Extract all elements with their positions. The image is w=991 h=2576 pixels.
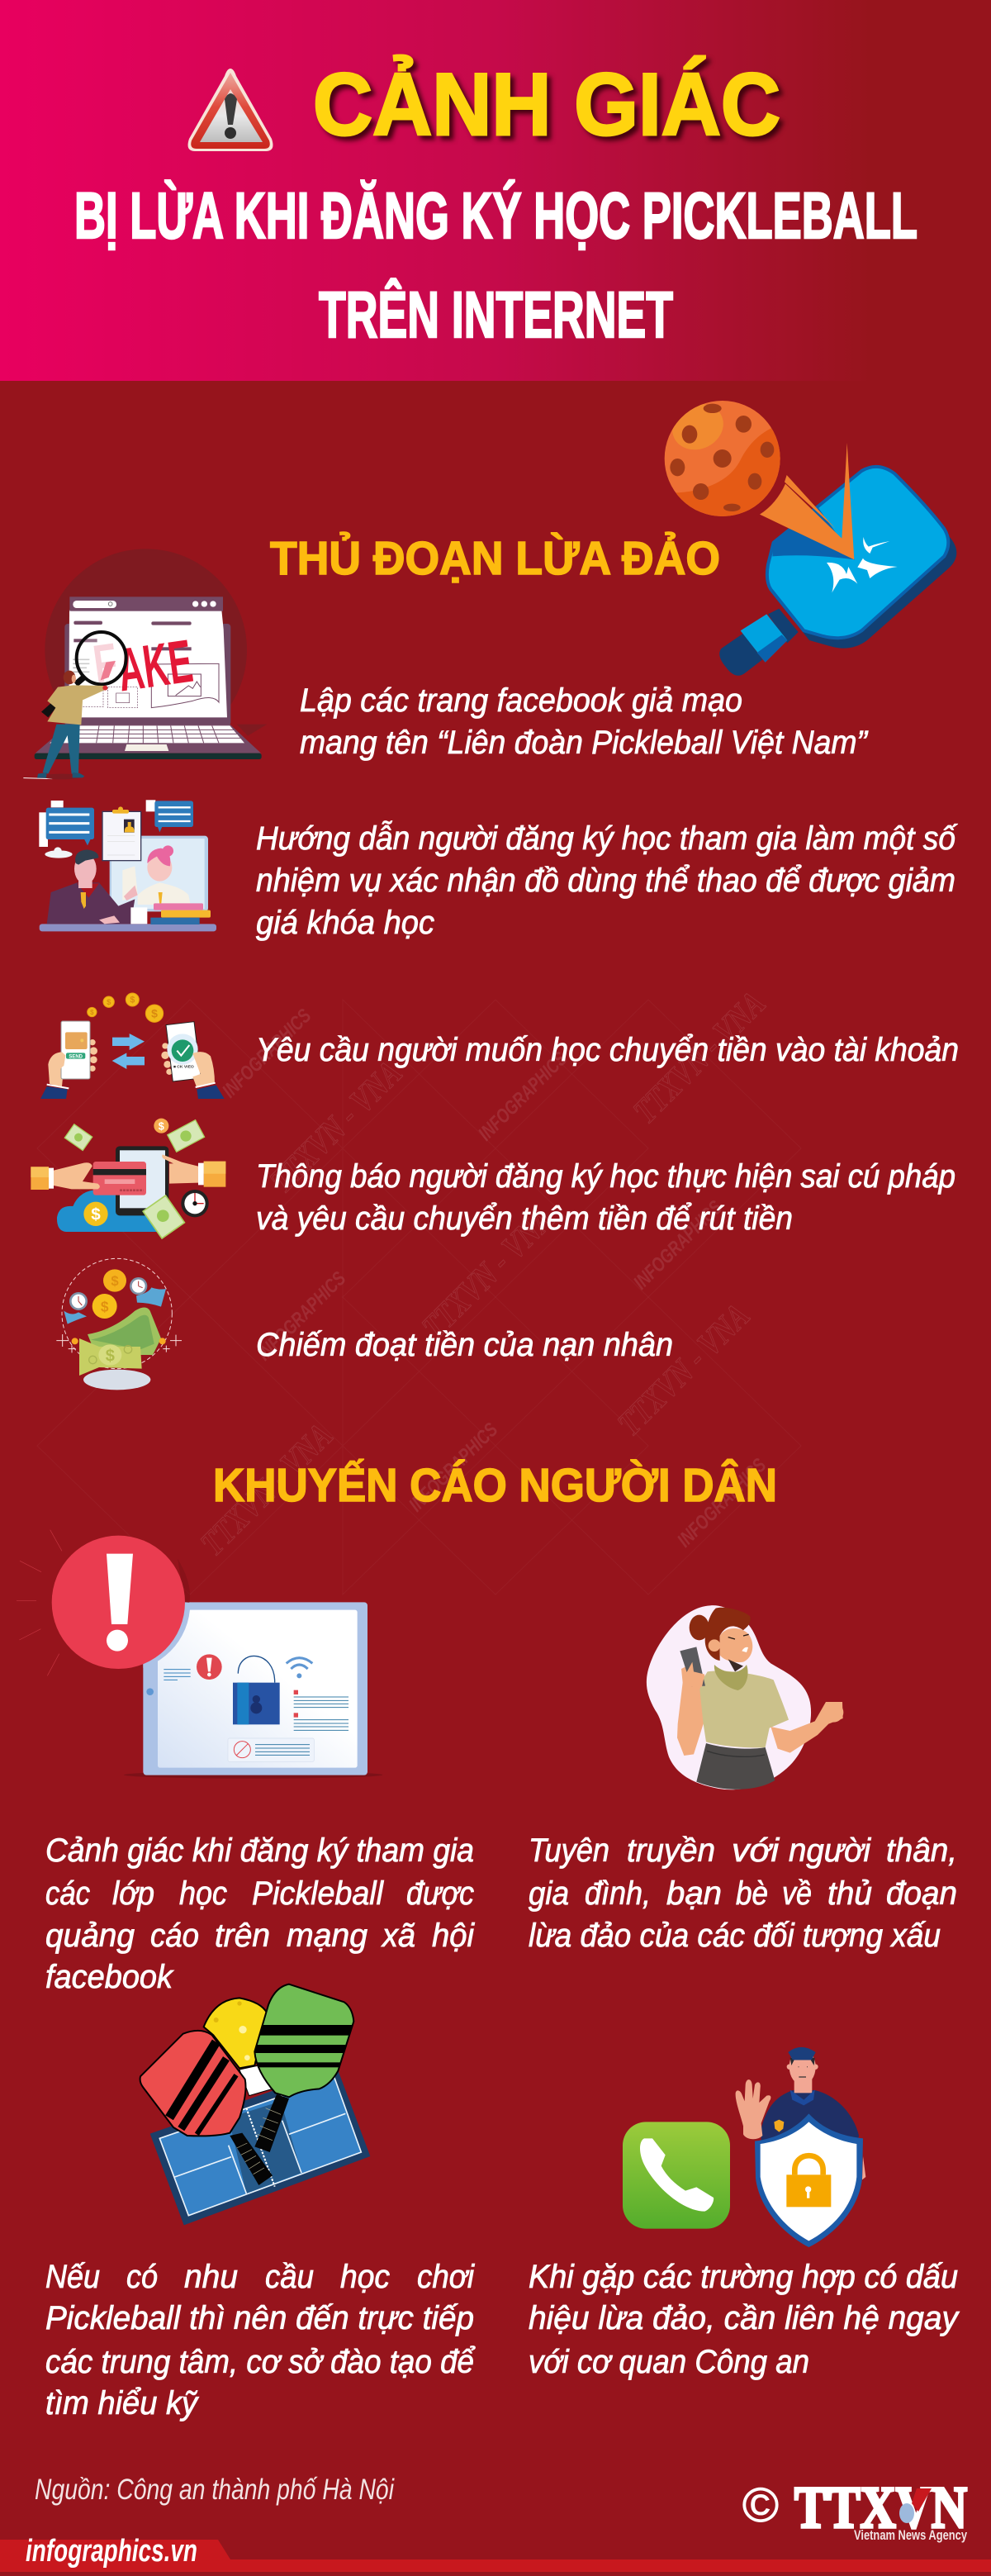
keyboard base: [36, 725, 261, 753]
watermarks: TTXVN - VNA: [611, 1297, 757, 1443]
icon: phone and police shield: [623, 2047, 865, 2247]
logo: TTXVN: ©: [742, 2479, 779, 2532]
text: stay alert: các: [45, 1875, 90, 1912]
impact streak: [785, 475, 836, 529]
text: go to training centres: học: [340, 2259, 390, 2295]
icon: phone money transfer: $: [130, 996, 135, 1005]
text: verification tasks: Hướng dẫn người đăng ký học tham gia làm một số: [256, 820, 958, 857]
text: contact police: Khi gặp các trường hợp có dấu: [529, 2259, 958, 2295]
magnifier: [77, 632, 126, 684]
text: stay alert: cáo: [150, 1918, 199, 1954]
text: spread awareness: Tuyên: [529, 1832, 609, 1869]
text: go to training centres: tìm hiểu kỹ: [45, 2385, 200, 2422]
speech bubbles: [39, 812, 48, 847]
text: fake facebook pages: [300, 682, 869, 761]
watermarks: INFOGRAPHICS: [474, 1048, 571, 1145]
icon: card payment with money: [31, 1119, 225, 1238]
header title: [74, 55, 918, 351]
man: [23, 778, 52, 779]
text: stay alert: học: [179, 1875, 227, 1912]
text: stay alert: lớp: [112, 1875, 154, 1912]
icon: stolen money: $: [111, 1273, 119, 1289]
text: stay alert: Pickleball: [252, 1875, 384, 1912]
text: contact police: với cơ quan Công an: [529, 2344, 809, 2380]
text: stay alert: trên: [215, 1918, 270, 1954]
paddle shadow and handle: [773, 475, 956, 649]
watermarks: TTXVN - VNA: [263, 1054, 410, 1200]
text: go to training centres: cầu: [265, 2259, 314, 2295]
icon: pickleball ball and paddle: [665, 396, 956, 676]
watermarks: INFOGRAPHICS: [673, 1454, 771, 1552]
text: spread awareness: truyền: [627, 1832, 715, 1869]
source note: Nguồn: Công an thành phố Hà Nội: [35, 2474, 395, 2506]
text: stay alert: mạng: [287, 1918, 367, 1954]
text: contact police: [529, 2259, 960, 2380]
text: go to training centres: các trung tâm, cơ sở đào tạo để: [45, 2344, 476, 2380]
text: spread awareness: thủ: [827, 1875, 872, 1912]
FAKE label: AKE: [113, 627, 197, 705]
text: go to training centres: nhu: [184, 2259, 238, 2295]
green paddle: [254, 2094, 289, 2152]
watermarks: INFOGRAPHICS: [629, 1196, 727, 1294]
text: go to training centres: chơi: [417, 2259, 475, 2295]
cracks: [827, 537, 898, 592]
text: fake facebook pages: mang tên “Liên đoàn Pickleball Việt Nam”: [300, 725, 869, 761]
text: stay alert: hội: [432, 1918, 475, 1954]
yellow paddle: [204, 1998, 267, 2068]
icon: stolen money: [56, 1258, 182, 1390]
left hand phone: [48, 1052, 64, 1086]
icon: alert tablet: [17, 1530, 382, 1779]
text: stay alert: [45, 1832, 475, 1995]
text: spread awareness: với: [732, 1832, 780, 1869]
text: stay alert: quảng: [45, 1918, 135, 1954]
icon: online consultation: [39, 800, 216, 931]
icon: fake website laptop: F: [89, 631, 121, 695]
icon: stolen money: $: [101, 1298, 109, 1314]
watermarks: INFOGRAPHICS: [405, 1419, 502, 1516]
police officer: [761, 2090, 859, 2162]
right hand phone: [162, 1043, 168, 1049]
text: spread awareness: đoạn: [886, 1875, 957, 1912]
icon: warning triangle: [188, 69, 273, 151]
icon: card payment with money: $: [159, 1120, 164, 1132]
text: contact police: hiệu lừa đảo, cần liên hệ ngay: [529, 2300, 960, 2336]
phone app icon: [623, 2122, 730, 2229]
text: money appropriated: Chiếm đoạt tiền của nạn nhân: [256, 1327, 673, 1363]
logo: TTXVN: [742, 2474, 967, 2543]
red paddle: [230, 2133, 273, 2185]
watermarks: TTXVN - VNA: [627, 985, 773, 1131]
arrows: [112, 1034, 145, 1050]
text: syntax error notice: [256, 1158, 955, 1237]
text: spread awareness: đình,: [585, 1875, 651, 1912]
padlock: [238, 1656, 275, 1683]
clock: [181, 1190, 209, 1217]
banknotes: [64, 1124, 92, 1151]
watermarks: TTXVN - VNA: [194, 1417, 340, 1563]
text: spread awareness: bè: [736, 1875, 768, 1912]
text: go to training centres: [45, 2259, 476, 2422]
watermarks: INFOGRAPHICS: [253, 1267, 350, 1365]
text: spread awareness: về: [782, 1875, 812, 1912]
title: CẢNH GIÁC: CẢNH GIÁC: [313, 55, 780, 154]
text: stay alert: Cảnh giác khi đăng ký tham gia: [45, 1832, 474, 1869]
text: spread awareness: bạn: [666, 1875, 722, 1912]
text: stay alert: xã: [381, 1918, 415, 1954]
text: spread awareness: gia: [529, 1875, 569, 1912]
text: spread awareness: [529, 1832, 957, 1954]
text: go to training centres: có: [126, 2259, 158, 2295]
heading: THỦ ĐOẠN LỪA ĐẢO: THỦ ĐOẠN LỪA ĐẢO: [270, 531, 720, 585]
text: spread awareness: lừa đảo của các đối tượng xấu: [529, 1918, 941, 1954]
footer bar: [0, 2534, 991, 2572]
text: verification tasks: [256, 820, 958, 941]
icon: pickleball paddles on court: [140, 1984, 370, 2225]
text: spread awareness: thân,: [886, 1832, 957, 1869]
icon: phone money transfer: $: [90, 1009, 94, 1016]
icon: fake website laptop: [23, 549, 267, 779]
website label: infographics.vn: [26, 2534, 197, 2569]
text: stay alert: facebook: [45, 1959, 174, 1995]
text: stay alert: được: [406, 1875, 474, 1912]
text: verification tasks: nhiệm vụ xác nhận đồ dùng thể thao để được giảm: [256, 863, 955, 899]
wifi: [287, 1658, 312, 1669]
watermarks: INFOGRAPHICS: [218, 1005, 315, 1102]
watermarks: [37, 985, 801, 1595]
icon: phone money transfer: $: [107, 998, 111, 1006]
text: verification tasks: giá khóa học: [256, 905, 434, 941]
text: transfer request: Yêu cầu người muốn học chuyển tiền vào tài khoản: [256, 1032, 959, 1068]
watermarks: TTXVN - VNA: [415, 1200, 562, 1347]
text: go to training centres: Pickleball thì nên đến trực tiếp: [45, 2300, 474, 2336]
icon: phone money transfer: ■ CK VIEO: [173, 1065, 194, 1070]
text: spread awareness: người: [789, 1832, 871, 1869]
clipboard: [102, 811, 141, 861]
text: syntax error notice: và yêu cầu chuyển thêm tiền để rút tiền: [256, 1200, 793, 1237]
title line 3: TRÊN INTERNET: [319, 278, 673, 351]
alert circle: [52, 1536, 185, 1669]
text: go to training centres: Nếu: [45, 2259, 100, 2295]
header band: [0, 0, 991, 381]
text: fake facebook pages: Lập các trang facebook giả mạo: [300, 682, 742, 719]
icon: phone money transfer: [40, 993, 225, 1099]
icon: phone money transfer: SEND: [69, 1054, 83, 1059]
icon: woman on phone: [647, 1605, 843, 1789]
icon: card payment with money: $: [91, 1205, 101, 1224]
heading: KHUYẾN CÁO NGƯỜI DÂN: KHUYẾN CÁO NGƯỜI DÂN: [213, 1458, 777, 1512]
shield with padlock: [755, 2113, 863, 2247]
icon: phone money transfer: $: [151, 1007, 158, 1020]
ball: [665, 401, 780, 516]
icon: stolen money: $: [106, 1347, 115, 1365]
